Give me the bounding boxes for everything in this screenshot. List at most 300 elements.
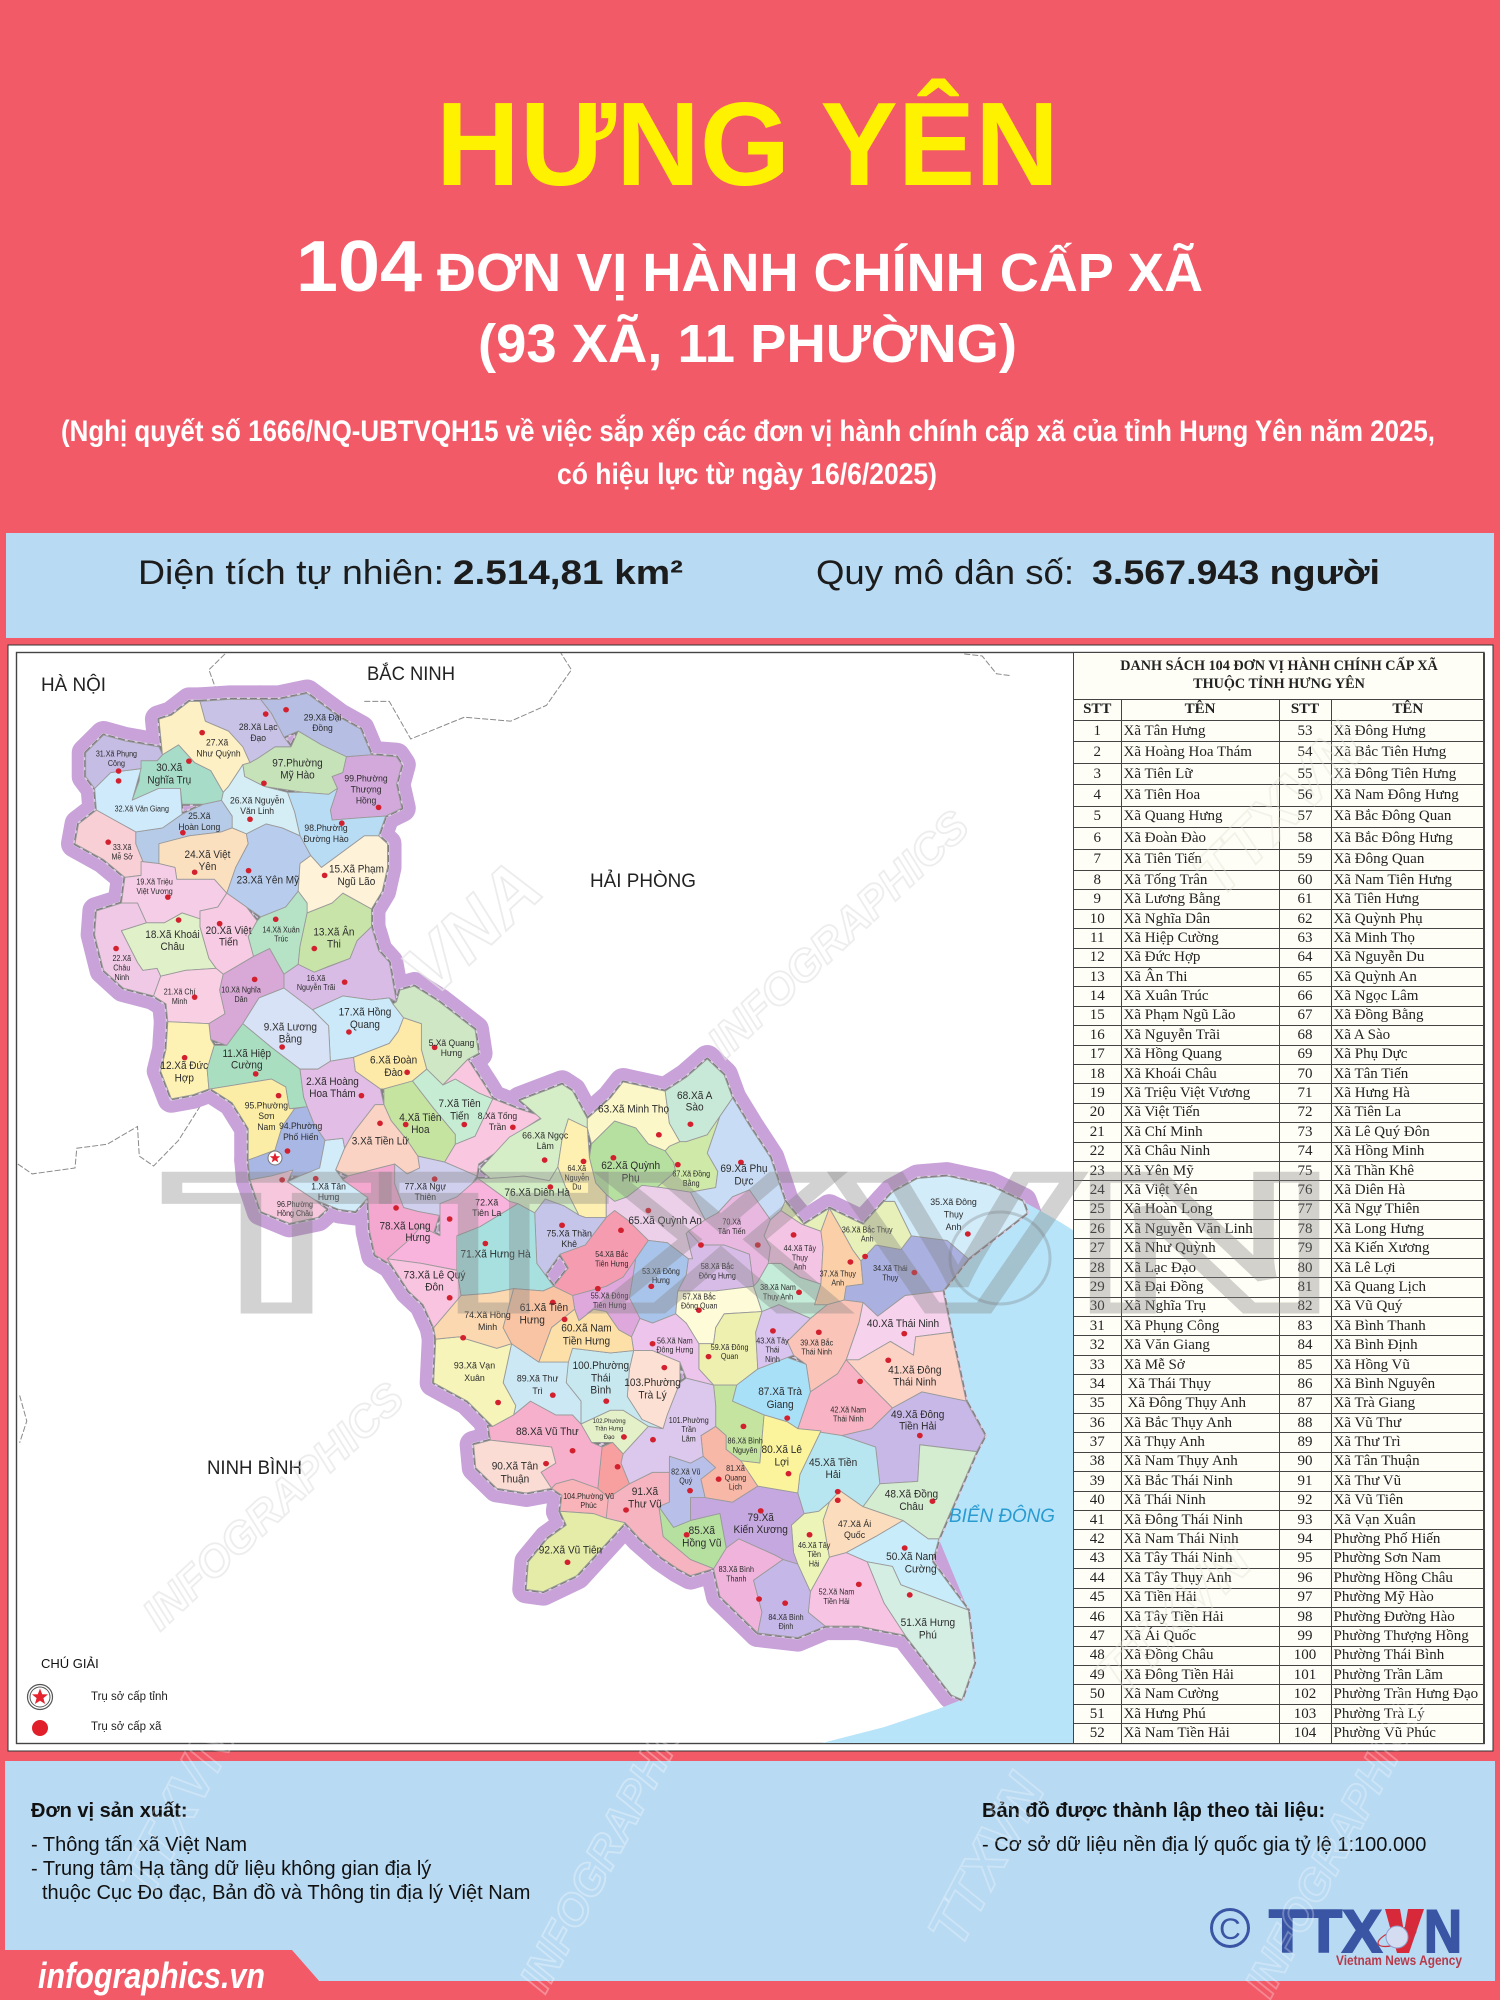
commune labels north: Hoàn Long (178, 822, 220, 832)
table: list of 104 units: Xã Đông Tiên Hưng (1334, 766, 1456, 782)
table: list of 104 units: 6 (1094, 830, 1101, 846)
table: list of 104 units: 35 (1090, 1395, 1105, 1411)
table: list of 104 units: Xã Đông Tiền Hải (1124, 1667, 1234, 1683)
commune 37 (815, 1208, 863, 1305)
commune labels south: Hưng (652, 1276, 670, 1285)
commune labels south: Anh (946, 1222, 961, 1232)
table: list of 104 units: Xã Lạc Đạo (1124, 1260, 1196, 1276)
commune labels south: 62.Xã Quỳnh (601, 1160, 660, 1172)
table: list of 104 units: 32 (1090, 1337, 1105, 1353)
commune labels south: Trần Hưng (595, 1425, 624, 1433)
table: list of 104 units: Xã Tân Tiến (1334, 1066, 1408, 1082)
commune labels south: Cường (905, 1563, 937, 1575)
commune labels north: Công (108, 759, 125, 768)
source credits (982, 1800, 1426, 1856)
watermarks: diagonal: TTXVN (915, 1763, 1058, 1956)
table: list of 104 units: 43 (1090, 1550, 1105, 1566)
commune 35 (884, 1176, 1027, 1259)
table: list of 104 units: Xã Hồng Quang (1124, 1046, 1222, 1062)
commune labels south: Tiền (807, 1550, 821, 1559)
tab: infographics.vn: infographics.vn (38, 1955, 265, 1996)
commune labels north: 2.Xã Hoàng (306, 1075, 359, 1088)
commune labels north: Minh (172, 997, 187, 1006)
commune 38 (754, 1263, 827, 1318)
commune labels north: 13.Xã Ân (313, 925, 355, 939)
commune labels south: 83.Xã Bình (719, 1565, 754, 1574)
table: list of 104 units: 47 (1090, 1628, 1105, 1644)
table: list of 104 units: 16 (1090, 1027, 1105, 1043)
commune labels north: Bằng (279, 1032, 302, 1046)
table: list of 104 units: Xã Quỳnh Phụ (1334, 911, 1423, 927)
table: list of 104 units: 60 (1298, 872, 1312, 888)
commune labels south: Thuận (501, 1473, 529, 1485)
commune labels south: Nguyên (733, 1446, 757, 1455)
legend: commune seat: Trụ sở cấp xã (91, 1721, 162, 1733)
commune labels south: 84.Xã Bình (768, 1613, 804, 1622)
commune labels north: Châu (161, 941, 185, 953)
table: list of 104 units: Xã Quang Lịch (1334, 1279, 1426, 1295)
commune 18 (121, 913, 216, 976)
commune labels north: Quang (350, 1019, 380, 1031)
commune labels north: Mễ Sở (111, 852, 133, 862)
watermarks: diagonal: INFOGRAPHICS (511, 1679, 712, 2000)
table: list of 104 units: Xã Lê Quý Đôn (1334, 1124, 1430, 1140)
commune labels south: Lợi (775, 1456, 789, 1468)
commune labels north: Tiến (450, 1110, 469, 1122)
commune labels south: Phú (919, 1629, 937, 1642)
commune 7 (412, 1069, 493, 1144)
commune 54 (554, 1211, 648, 1296)
table: list of 104 units: 8 (1094, 872, 1101, 888)
commune labels south: 92.Xã Vũ Tiên (539, 1544, 602, 1557)
table: list of 104 units: 93 (1298, 1512, 1312, 1528)
commune 102 (581, 1410, 648, 1454)
table: list of 104 units: Xã Bắc Đông Quan (1334, 808, 1451, 824)
table: list of 104 units: Xã Tiên Tiến (1124, 851, 1202, 867)
table: list of 104 units: 77 (1298, 1201, 1312, 1217)
commune labels north: Nghĩa Trụ (147, 774, 191, 787)
commune labels north: Dân (235, 994, 248, 1004)
commune labels south: 49.Xã Đông (891, 1409, 945, 1421)
wordmark: N (1424, 1898, 1462, 1965)
commune labels north: Nam (257, 1122, 275, 1132)
commune labels south: Trần (682, 1425, 696, 1434)
table: list of 104 units: Xã Nghĩa Dân (1124, 911, 1210, 927)
table: list of 104 units: Xã Tiên La (1334, 1104, 1401, 1120)
commune labels north (96, 712, 517, 1244)
commune 1 (287, 1138, 368, 1211)
commune 52 (808, 1553, 905, 1635)
commune labels north: 5.Xã Quang (429, 1037, 474, 1048)
table: list of 104 units: Phường Thái Bình (1334, 1647, 1444, 1663)
commune labels north: Sơn (258, 1111, 274, 1121)
commune labels north: 96.Phường (277, 1200, 313, 1209)
table: list of 104 units: 31 (1090, 1318, 1105, 1334)
commune 3 (336, 1105, 420, 1176)
table: list of 104 units: 52 (1090, 1725, 1105, 1741)
table: list of 104 units: 96 (1298, 1570, 1312, 1586)
table: list of 104 units: 66 (1298, 988, 1312, 1004)
commune 40 (846, 1291, 951, 1360)
table: list of 104 units: 2 (1094, 744, 1101, 760)
heading: breakdown: (93 XÃ, 11 PHƯỜNG) (478, 314, 1017, 374)
commune 76 (478, 1167, 579, 1215)
commune labels south: 55.Xã Đông (591, 1291, 628, 1301)
table: list of 104 units: 78 (1298, 1221, 1312, 1237)
table: list of 104 units: Xã Thụy Anh (1124, 1434, 1205, 1450)
commune 70 (688, 1190, 770, 1286)
commune 22 (95, 903, 161, 996)
commune labels north: Hoa Thám (309, 1088, 356, 1100)
commune labels north: 12.Xã Đức (160, 1060, 208, 1072)
icon: provincial seat star (268, 1151, 282, 1165)
commune labels north: 98.Phường (304, 823, 348, 833)
commune labels south: Đôn (425, 1281, 444, 1293)
table: list of 104 units: 64 (1298, 949, 1312, 965)
table: list of 104 units: 59 (1298, 851, 1312, 867)
table: list of 104 units: 21 (1090, 1124, 1105, 1140)
legend: provincial seat (28, 1684, 168, 1710)
commune labels south: 100.Phường (572, 1360, 629, 1372)
commune 13 (298, 893, 371, 972)
commune labels north: 78.Xã Long (379, 1220, 431, 1232)
table: list of 104 units: 71 (1298, 1085, 1312, 1101)
table: list of 104 units: Xã Thái Ninh (1124, 1492, 1206, 1508)
commune labels north: 99.Phường (344, 773, 388, 784)
commune 80 (741, 1415, 821, 1493)
commune labels south: 104.Phường Vũ (563, 1491, 614, 1501)
table: list of 104 units: Xã Nguyễn Du (1334, 949, 1424, 965)
table: list of 104 units: 12 (1090, 949, 1105, 965)
commune labels south: Thụy (944, 1209, 964, 1219)
table: list of 104 units: 4 (1094, 787, 1101, 803)
commune labels north: Thượng (351, 784, 382, 794)
table: list of 104 units: Xã Việt Yên (1124, 1182, 1198, 1198)
table: list of 104 units: 81 (1298, 1279, 1312, 1295)
map panel frame (8, 645, 1493, 1751)
commune labels south: 41.Xã Đông (888, 1364, 942, 1377)
commune 72 (387, 1178, 518, 1270)
table: list of 104 units: Xã Vạn Xuân (1334, 1512, 1416, 1528)
commune 64 (558, 1119, 606, 1217)
table: list of 104 units: 25 (1090, 1201, 1105, 1217)
commune labels north: 24.Xã Việt (185, 849, 231, 861)
commune labels north: Tiến (219, 936, 238, 949)
commune 49 (842, 1392, 985, 1484)
commune 82 (659, 1456, 716, 1527)
neighbouring province boundaries (18, 650, 1011, 1443)
table: list of 104 units: 63 (1298, 930, 1312, 946)
table: list of 104 units: 97 (1298, 1589, 1312, 1605)
table: list of 104 units: Xã Đông Thái Ninh (1124, 1512, 1243, 1528)
commune labels south: 93.Xã Vạn (454, 1360, 495, 1371)
commune labels south: Nguyễn (564, 1173, 589, 1183)
table: list of 104 units: 80 (1298, 1260, 1312, 1276)
neighbouring province names: HẢI PHÒNG (590, 870, 696, 892)
table: list of 104 units: Xã Tiên Lữ (1124, 766, 1192, 782)
table: list of 104 units: Xã Bắc Đông Hưng (1334, 830, 1453, 846)
commune 41 (846, 1332, 966, 1408)
table: list of 104 units: Xã Tiên Hưng (1334, 891, 1419, 907)
commune labels north: 18.Xã Khoái (145, 929, 200, 941)
commune labels south: 75.Xã Thần (546, 1228, 592, 1239)
commune 99 (330, 755, 402, 820)
table: list of 104 units: Xã Việt Tiến (1124, 1104, 1200, 1120)
table: list of 104 units: Xã Đông Quan (1334, 851, 1424, 867)
neighbouring province names: HÀ NỘI (41, 674, 106, 696)
table: list of 104 units: Xã Tây Thụy Anh (1124, 1570, 1232, 1586)
commune labels south: Ninh (765, 1355, 780, 1364)
table: list of 104 units: STT (1083, 701, 1111, 717)
commune labels south: Đông Quan (681, 1301, 718, 1311)
source credits: Bản đồ được thành lập theo tài liệu: (982, 1800, 1325, 1822)
table: list of 104 units: Xã Hoàn Long (1124, 1201, 1213, 1217)
table: list of 104 units: 50 (1090, 1686, 1105, 1702)
commune 29 (261, 693, 371, 757)
communes (75, 693, 1027, 1700)
producer credits: - Thông tấn xã Việt Nam (31, 1834, 247, 1856)
commune labels south: Quốc (844, 1530, 866, 1540)
commune labels north: 17.Xã Hồng (339, 1006, 391, 1019)
table: list of 104 units: 5 (1094, 808, 1101, 824)
commune 56 (632, 1314, 714, 1385)
commune labels north: 33.Xã (113, 843, 132, 852)
commune labels south: Thụy Anh (763, 1292, 793, 1302)
commune 53 (629, 1240, 688, 1323)
table: list of 104 units: 76 (1298, 1182, 1312, 1198)
commune labels north: 6.Xã Đoàn (370, 1054, 417, 1067)
table: list of 104 units: 55 (1298, 766, 1312, 782)
commune labels south: 47.Xã Ái (838, 1519, 871, 1529)
commune labels south: Khê (561, 1239, 577, 1249)
table: list of 104 units: 38 (1090, 1453, 1105, 1469)
commune 10 (209, 949, 284, 1045)
commune 92 (526, 1511, 625, 1592)
table: list of 104 units: Xã Hưng Phú (1124, 1706, 1206, 1722)
table: list of 104 units: 49 (1090, 1667, 1105, 1683)
neighbouring province names (41, 663, 696, 1479)
commune unlabelled (598, 1442, 629, 1498)
table: list of 104 units: Xã Đông Hưng (1334, 723, 1426, 739)
commune labels south: 80.Xã Lê (762, 1444, 802, 1456)
table: list of 104 units: 41 (1090, 1512, 1105, 1528)
commune labels south: 69.Xã Phụ (720, 1163, 768, 1175)
table: list of 104 units: Xã Bắc Thụy Anh (1124, 1415, 1232, 1431)
table: list of 104 units: 44 (1090, 1570, 1105, 1586)
table: list of 104 units: Xã Châu Ninh (1124, 1143, 1210, 1159)
commune 51 (867, 1562, 975, 1700)
commune labels south: Tiền Hưng (563, 1335, 610, 1348)
table: list of 104 units: 103 (1294, 1706, 1316, 1722)
agency name: Vietnam News Agency (1336, 1952, 1462, 1968)
legend: CHÚ GIẢI (41, 1656, 99, 1671)
commune labels north: 11.Xã Hiệp (222, 1047, 271, 1060)
table: list of 104 units: 58 (1298, 830, 1312, 846)
commune labels north: Hồng Châu (277, 1209, 313, 1218)
commune labels south: Thái Ninh (833, 1414, 864, 1424)
commune 12 (161, 1022, 214, 1099)
table: list of 104 units: Xã Tây Thái Ninh (1124, 1550, 1233, 1566)
watermarks: diagonal: INFOGRAPHICS (1236, 1684, 1437, 2000)
commune labels south: Định (779, 1622, 793, 1631)
commune labels north: Đồng (312, 723, 333, 733)
commune labels south: Lãm (682, 1434, 696, 1443)
commune 98 (287, 788, 386, 867)
legend: commune seat (32, 1720, 162, 1736)
red commune seats (105, 707, 971, 1606)
table: list of 104 units: 27 (1090, 1240, 1105, 1256)
table: list of 104 units: 23 (1090, 1163, 1105, 1179)
commune labels north: Yên (199, 860, 217, 873)
commune labels north: 21.Xã Chí (164, 987, 196, 997)
table: list of 104 units: 7 (1094, 851, 1101, 867)
table: list of 104 units: Xã Như Quỳnh (1124, 1240, 1216, 1256)
commune labels north: Văn Linh (240, 806, 274, 816)
table: list of 104 units: Xã Triệu Việt Vương (1124, 1085, 1250, 1101)
commune 20 (200, 893, 257, 974)
table: list of 104 units: 104 (1294, 1725, 1316, 1741)
commune 78 (343, 1164, 439, 1270)
commune 55 (573, 1259, 640, 1337)
watermark: large TTXVN (168, 1137, 1333, 1349)
producer credits: Đơn vị sản xuất: (31, 1800, 187, 1822)
seats north (105, 707, 553, 1246)
commune 62 (589, 1121, 676, 1201)
commune 15 (298, 836, 387, 913)
commune 9 (243, 988, 330, 1069)
table: list of 104 units: 65 (1298, 969, 1312, 985)
commune 101 (621, 1378, 716, 1484)
commune labels north: 32.Xã Văn Giang (115, 804, 169, 814)
table: list of 104 units: Xã Quỳnh An (1334, 969, 1417, 985)
commune 16 (284, 927, 396, 1010)
commune 26 (221, 765, 300, 836)
commune labels south: 89.Xã Thư (517, 1373, 558, 1384)
table: list of 104 units: Xã Yên Mỹ (1124, 1163, 1194, 1179)
table: list of 104 units: 34 (1090, 1376, 1105, 1392)
commune labels south: 87.Xã Trà (758, 1386, 802, 1398)
table: list of 104 units: Xã Minh Thọ (1334, 930, 1415, 946)
table: list of 104 units: Xã Tiền Hải (1124, 1589, 1197, 1605)
commune labels south: Thư Vũ (628, 1498, 662, 1511)
table: list of 104 units: 11 (1090, 930, 1104, 946)
commune 63 (587, 1082, 680, 1151)
commune labels north: 1.Xã Tân (311, 1181, 346, 1191)
commune labels north: Đạo (250, 733, 266, 743)
table: list of 104 units: Phường Trần Lãm (1334, 1667, 1443, 1683)
table: list of 104 units: Xã Vũ Thư (1334, 1415, 1401, 1431)
wordmark: TTX (1269, 1898, 1382, 1965)
table: list of 104 units: Xã Đức Hợp (1124, 949, 1200, 965)
table: list of 104 units: TÊN (1185, 701, 1215, 717)
table: list of 104 units: Phường Sơn Nam (1334, 1550, 1441, 1566)
table: list of 104 units: Xã Trà Giang (1334, 1395, 1415, 1411)
commune labels north: 29.Xã Đại (304, 712, 341, 722)
table: list of 104 units: Xã Ân Thi (1124, 969, 1187, 985)
logo: TTXVN (1212, 1898, 1462, 1968)
commune labels north: Phố Hiến (283, 1132, 318, 1142)
commune labels south: Bình (590, 1384, 611, 1397)
table: list of 104 units: Xã Kiến Xương (1334, 1240, 1430, 1256)
seats south (447, 1121, 971, 1606)
commune labels south: Trà Lý (638, 1389, 667, 1401)
commune labels south: 36.Xã Bắc Thụy (842, 1225, 893, 1235)
commune labels south: 50.Xã Nam (886, 1551, 937, 1563)
watermarks: diagonal: INFOGRAPHICS (133, 1373, 414, 1639)
commune labels north: Như Quỳnh (196, 748, 241, 758)
commune labels south: 85.Xã (689, 1525, 715, 1537)
table: list of 104 units: Xã Mễ Sở (1124, 1357, 1185, 1373)
commune 32 (95, 769, 182, 832)
table: list of 104 units: Xã Bình Định (1334, 1337, 1418, 1353)
commune labels south: 34.Xã Thái (873, 1264, 908, 1273)
commune 14 (248, 891, 307, 974)
commune 97 (243, 731, 346, 794)
commune labels north: Thiên (415, 1192, 436, 1202)
red V and globe (1376, 1909, 1424, 1953)
commune labels south: Hồng Vũ (682, 1537, 722, 1550)
legend: provincial seat: Trụ sở cấp tỉnh (91, 1691, 168, 1703)
commune labels north: Trúc (274, 934, 288, 944)
table: list of 104 units: Xã Xuân Trúc (1124, 988, 1208, 1004)
table: list of 104 units: Xã Diên Hà (1334, 1182, 1405, 1198)
commune labels south: Du (572, 1182, 581, 1192)
table: list of 104 units: Xã Nam Tiền Hải (1124, 1725, 1230, 1741)
commune 50 (846, 1521, 968, 1610)
commune 79 (690, 1486, 804, 1564)
commune labels south: Thái (591, 1372, 611, 1384)
table: list of 104 units: 100 (1294, 1647, 1316, 1663)
commune labels south: 64.Xã (567, 1164, 587, 1173)
producer credits (31, 1800, 530, 1904)
commune labels north: Mỹ Hào (280, 769, 315, 782)
commune labels south: Minh (478, 1322, 497, 1332)
table: list of 104 units: 84 (1298, 1337, 1312, 1353)
commune labels south: 54.Xã Bắc (595, 1249, 628, 1259)
commune labels south: Thái Ninh (893, 1376, 936, 1389)
commune labels south: 74.Xã Hồng (464, 1310, 511, 1320)
commune labels north: 27.Xã (206, 737, 229, 747)
commune 68 (665, 1059, 733, 1142)
table: list of 104 units: Xã Đoàn Đào (1124, 830, 1206, 846)
commune labels north: 30.Xã (156, 762, 182, 774)
wordmark (1269, 1898, 1462, 1965)
table: list of 104 units: 1 (1094, 723, 1101, 739)
table: list of 104 units: 62 (1298, 911, 1312, 927)
commune labels south: 52.Xã Nam (819, 1587, 854, 1597)
table: list of 104 units: Xã Hồng Vũ (1334, 1357, 1410, 1373)
table: list of 104 units: Xã Lương Bằng (1124, 891, 1220, 907)
commune labels south: 70.Xã (722, 1217, 742, 1227)
commune 24 (159, 828, 248, 893)
table: list of 104 units: Phường Đường Hào (1334, 1609, 1455, 1625)
table: list of 104 units: Xã Ái Quốc (1124, 1628, 1196, 1644)
table: list of 104 units: 85 (1298, 1357, 1312, 1373)
commune labels south: 45.Xã Tiền (809, 1456, 857, 1469)
table: list of 104 units: 48 (1090, 1647, 1105, 1663)
commune 87 (733, 1357, 810, 1429)
commune labels north: 16.Xã (307, 973, 326, 983)
commune 95 (211, 1079, 295, 1160)
commune 65 (606, 1185, 705, 1259)
commune labels south: Tiên Hưng (593, 1301, 626, 1310)
table: list of 104 units: Xã Bắc Thái Ninh (1124, 1473, 1233, 1489)
commune labels south: Đông Hưng (656, 1345, 693, 1355)
commune labels north: 97.Phường (272, 757, 323, 770)
table: list of 104 units: 13 (1090, 969, 1105, 985)
table: list of 104 units: 92 (1298, 1492, 1312, 1508)
commune 47 (823, 1491, 903, 1557)
